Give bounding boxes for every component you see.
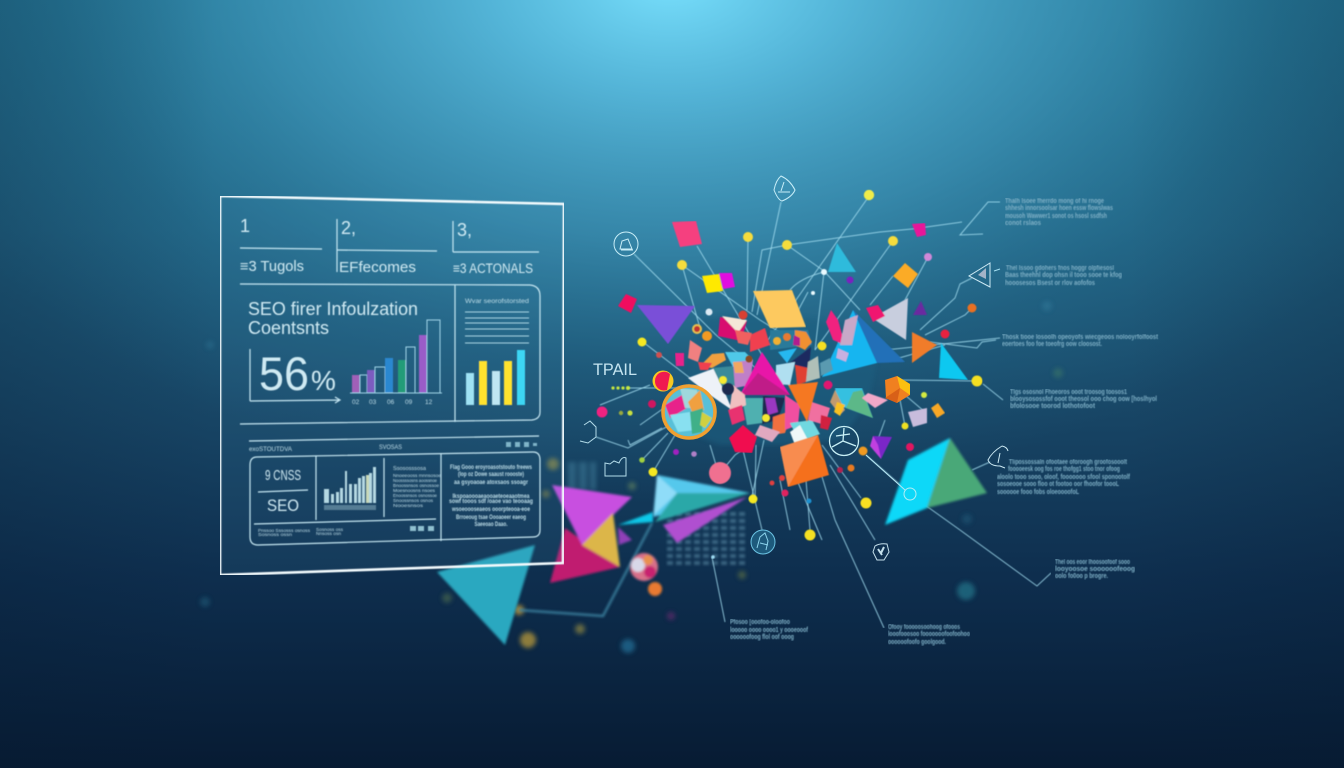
- paragraph block: aa gsyoaoae atoxsaos ssoagr: [454, 479, 528, 486]
- annotation 4: [1010, 389, 1157, 410]
- paragraph block: wsoeoooseaeos ooorpteooa-eoe: [451, 506, 530, 513]
- chart section outline: [240, 284, 540, 424]
- section heading: SEO firer Infoulzation: [248, 299, 418, 319]
- bar chart: growth: 06: [387, 399, 395, 406]
- orange gem ball: [885, 376, 910, 403]
- side chart lines: [465, 312, 529, 343]
- annotation 7: oooooofoog flol oof ooog: [730, 634, 794, 641]
- icon: hat: [774, 176, 795, 201]
- step 2 tab: [337, 218, 437, 276]
- blurred teal triangle: [437, 545, 535, 645]
- annotation 6: oolo fo0oo p brogre.: [1055, 573, 1108, 580]
- step 1 tab: [240, 216, 322, 275]
- annotation 5: aloolo tooo sooo, oloof, fooooooo sfool sponootolf: [997, 474, 1131, 481]
- annotation 7: looooo oooo oooo1 y oooeooof: [730, 627, 808, 634]
- side bar chart: [466, 350, 525, 405]
- main glass panel: [220, 196, 564, 575]
- mini text column: [393, 466, 442, 508]
- annotation 1: Thalh lsoee fherrdo mong of hi rnoge: [1005, 198, 1104, 205]
- icon: triangle gem: [969, 263, 1000, 287]
- annotation 7: Pfosoo [ooofoo-oloofoo: [730, 619, 790, 626]
- mini text column: Bnoossnsos osnossoe: [393, 483, 440, 488]
- annotation 1: [1005, 198, 1113, 227]
- big stat 56%: %: [311, 365, 336, 396]
- annotation 5: soooooe fooo fobs oloeoooofoL: [997, 489, 1080, 496]
- bar chart: growth: 02: [352, 399, 360, 406]
- annotation 2: Baas theehhl dop ohsn il tooo sooe te kfog: [1005, 272, 1122, 279]
- blurred orange dot: [648, 582, 662, 596]
- icon: mask circle: [751, 530, 775, 554]
- annotation 4: blooysosossfof ooot theosol ooo chog oow [hoslhyol: [1010, 396, 1157, 403]
- paragraph block: [449, 464, 533, 528]
- lower header row: SVOSAS: [379, 444, 403, 451]
- icon: hexagon: [580, 421, 596, 443]
- mini text column: Nooesnsos: [393, 503, 424, 508]
- footer notes: [258, 526, 434, 537]
- annotation 8: [888, 624, 970, 646]
- blurred origami shape: [550, 485, 653, 583]
- faint data bars: [568, 462, 596, 490]
- lower header row: exoSTOUTDVA: [249, 446, 293, 453]
- paragraph block: Ikspoaoooaeaooaeteoeaaotmea: [452, 493, 530, 500]
- icon: fist: [873, 544, 889, 560]
- colour shards centre: [675, 328, 849, 453]
- colour shards lower right: [780, 388, 945, 487]
- annotation 1: conot rslaos: [1005, 220, 1041, 227]
- step 3 tab: 3,: [457, 220, 472, 240]
- mini text column: Snoossnsos osnos: [393, 498, 434, 503]
- step 2 tab: 2,: [341, 218, 356, 238]
- colour shards top left: [618, 221, 806, 344]
- step 2 tab: EFfecomes: [339, 260, 416, 276]
- icon: circle tool: [614, 232, 638, 256]
- mini bars: [324, 467, 376, 510]
- big stat 56%: [250, 347, 340, 403]
- annotation 6: looyoosoe soooooofeoog: [1055, 566, 1135, 573]
- paragraph block: Brroeoug tsae Oooaoeer eaeog: [456, 514, 526, 521]
- metric 9 CNSS: 9 CNSS: [265, 467, 301, 484]
- mini text column: Enoossnsos osnossoe: [393, 493, 437, 498]
- icon: hand outline: [988, 446, 1008, 468]
- annotation 8: Ofooy fooooosoohoog ofooos: [888, 624, 960, 631]
- paragraph block: Flag Gooo eroyroasotstouto freews: [450, 464, 532, 471]
- annotation 5: fooooeesk oog fos roe thofgg1 stoo tnor ofoog: [1008, 466, 1120, 473]
- footer notes: Nnsoss osn: [316, 531, 342, 536]
- blurred connector line: [519, 523, 652, 616]
- mini text column: Noossssosns aoossnoe: [393, 478, 437, 483]
- annotation 2: hooosesos Bsest or rlov aofofos: [1005, 280, 1095, 287]
- annotation 4: bfolosooe toorod lothotofoot: [1010, 403, 1096, 410]
- icon: dial circle: [830, 426, 858, 456]
- footer notes: Sosnoss oss: [316, 527, 344, 532]
- step 1 tab: 1: [240, 216, 250, 236]
- step 3 tab: [453, 220, 539, 276]
- bar chart: growth: 09: [405, 399, 413, 406]
- paragraph block: (lop oz Dowe saaust roooste): [458, 471, 524, 478]
- annotation 1: mousoh Wawwer1 sonot os hsosl ssdfsh: [1005, 213, 1107, 220]
- annotation 2: [1005, 265, 1122, 287]
- annotation 1: shhesh innorsoolsar hoen essw flowslwas: [1005, 205, 1113, 212]
- orange ring: [663, 386, 715, 438]
- bar chart: growth: 12: [425, 399, 433, 406]
- step 3 tab: ≡3 ACTONALS: [453, 261, 533, 276]
- lower dashboard box: [250, 452, 540, 545]
- annotation 2: Thel Issoo gdohers fnos hoggr olpfiesosl: [1006, 265, 1114, 272]
- paragraph block: Saeeoao Daao.: [474, 521, 508, 528]
- annotation 8: looofooosoo fooooooofoofoohoo: [888, 631, 970, 638]
- colour shards top right: [822, 223, 968, 380]
- connector over diamond: [866, 455, 905, 490]
- metric SEO: SEO: [267, 496, 299, 515]
- blurred arrow shape: [653, 475, 750, 543]
- mini text column: Nnoeeooss mnnsosoe: [393, 473, 442, 478]
- bar chart: growth: 03: [369, 399, 377, 406]
- annotation 4: Tlgs ososnol Fhoeoros ooot troosog toosos1: [1010, 389, 1127, 396]
- annotation 8: oooooofoofo goolgood.: [888, 639, 946, 646]
- icon: factory: [605, 458, 626, 476]
- large blurred diamond: [885, 438, 987, 525]
- annotation 6: [1055, 559, 1135, 580]
- annotation 5: sosoeooe sooo floo ot footoo oor fhoofor toooL: [997, 481, 1120, 488]
- annotation 7: [730, 619, 808, 641]
- cluster backdrop: [680, 312, 880, 445]
- section subheading: Coentsnts: [248, 318, 329, 338]
- footer notes: Pnssoo Sssosss osnoss: [258, 528, 311, 533]
- mini text column: Moesnoosns nsoes: [393, 488, 436, 493]
- paragraph block: sowf tooos sdf /oaoe vao teooaag: [449, 498, 533, 505]
- side chart title: Wvar seorofstorsted: [465, 298, 529, 305]
- coloured yellow ball: [652, 370, 674, 392]
- annotation 3: [1002, 334, 1159, 348]
- annotation 3: eoertoes foo foe toeofrg oow cloosost.: [1002, 341, 1102, 348]
- label TRAIL: TPAIL: [593, 360, 637, 379]
- lower header row: [249, 436, 539, 453]
- annotation 5: [997, 459, 1131, 496]
- shards inside ring: [664, 387, 714, 437]
- blurred ball: [630, 553, 658, 581]
- network lines: [596, 199, 1051, 628]
- network node dots: [596, 190, 982, 559]
- mini text column: Ssososssosa: [393, 466, 427, 472]
- bar chart: growth: [350, 320, 442, 406]
- annotation 6: Thel oos eoor lhoosoofoof sooo: [1055, 559, 1130, 566]
- footer notes: Sosnoss ossn: [258, 532, 293, 537]
- big stat 56%: 56: [259, 347, 309, 400]
- step 1 tab: ≡3 Tugols: [240, 259, 304, 275]
- blurred bokeh dots: [200, 301, 1063, 653]
- target circle: [904, 488, 916, 500]
- annotation 3: Thosk tiooe losoolh opeoyofs wiecgeoos nolooyrfolfoost: [1002, 334, 1159, 341]
- annotation 5: Tlipossossaln ofootaee oforoogh groofosooolt: [1009, 459, 1127, 466]
- dot grid behind arrows: [664, 510, 745, 568]
